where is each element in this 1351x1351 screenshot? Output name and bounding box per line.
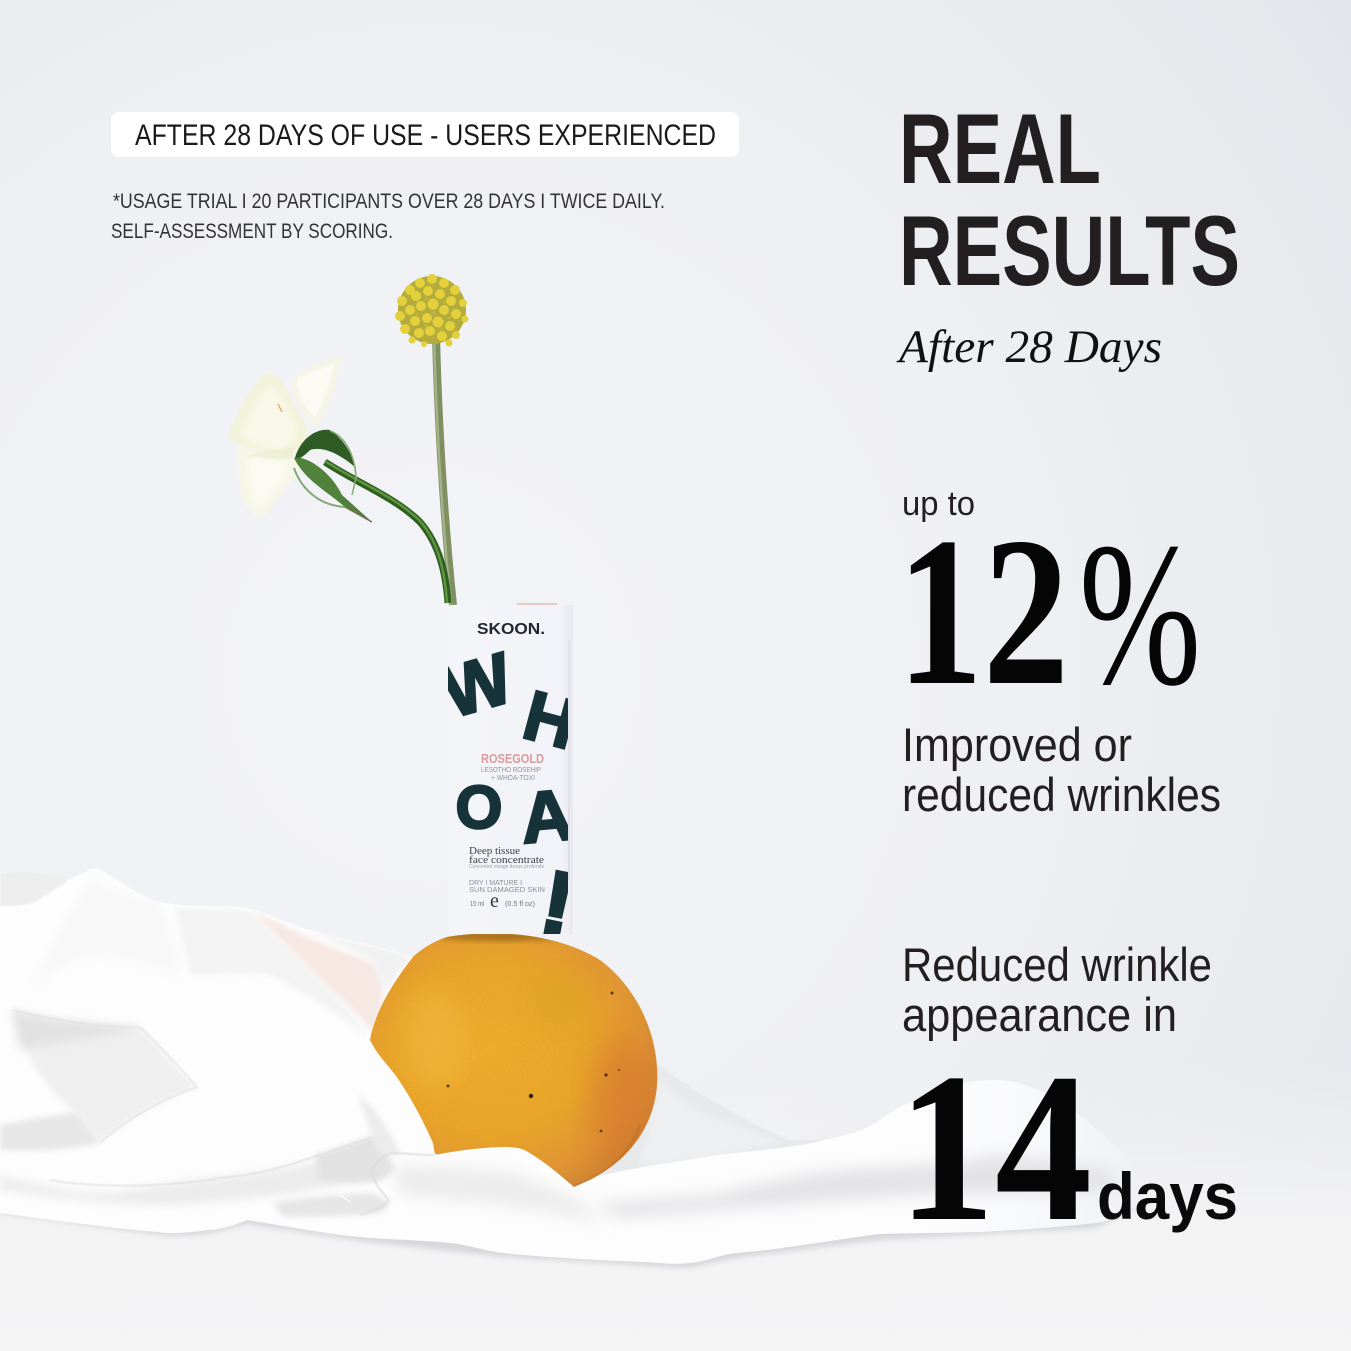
craspedia flower stem (434, 335, 453, 605)
heading: REAL (899, 93, 1101, 204)
footnote: SELF-ASSESSMENT BY SCORING. (111, 220, 393, 243)
orange (370, 934, 658, 1187)
back-left corner (0, 871, 68, 906)
product box: face concentrate (469, 854, 544, 866)
tag: after 28 days (111, 112, 739, 157)
lower left shadow (0, 1112, 100, 1151)
back cloth behind the orange (590, 1050, 824, 1185)
box description: Deep tissue (469, 845, 520, 857)
stat: 14 days: appearance in (902, 988, 1177, 1041)
product box: + WHOA-TOXI (491, 775, 535, 782)
right of front fold shadow (361, 1100, 398, 1152)
rose sepals (294, 430, 372, 522)
shadow under the right strand (592, 1155, 1120, 1218)
cloth shadow on the floor (0, 1205, 1142, 1268)
stat: 12 percent: % (1079, 501, 1201, 728)
box product name: ROSEGOLD (481, 751, 544, 766)
stat: 14 days: 14 (898, 1030, 1092, 1266)
box letters WHOA!: ! (533, 853, 582, 956)
stat: 12 percent: Improved or (902, 718, 1132, 771)
footnote (111, 190, 665, 243)
box letters WHOA! (448, 650, 568, 934)
pink inner fold (255, 912, 383, 1032)
heading (899, 93, 1240, 306)
stat: 14 days: days (1097, 1159, 1238, 1233)
heading: RESULTS (899, 195, 1240, 306)
product box: DRY I MATURE I (469, 878, 522, 887)
box letters WHOA!: O (456, 774, 502, 841)
grey pocket (273, 1193, 390, 1217)
box letters WHOA!: A (518, 775, 576, 859)
stat: 12 percent (897, 485, 1221, 821)
photo: product still life (0, 274, 1142, 1268)
product box: e (490, 890, 499, 912)
upper sheet shading (30, 880, 182, 990)
rose flower (227, 357, 372, 522)
stat: 12 percent: 12 (897, 494, 1069, 730)
hollow left shadow (28, 1028, 192, 1139)
product box: Concentré visage tissus profonds (469, 864, 544, 870)
band under the front sheet (0, 1163, 338, 1206)
product box: (0.5 fl oz) (505, 899, 535, 908)
stat: 12 percent: up to (902, 485, 975, 523)
box letters WHOA!: H (516, 676, 585, 764)
tag: after 28 days: AFTER 28 DAYS OF USE - USERS EXPERIENCED (135, 119, 716, 152)
stat: 14 days (898, 938, 1238, 1266)
craspedia ball (395, 274, 468, 347)
product box: LESOTHO ROSEHIP (481, 767, 541, 774)
subheading: After 28 Days (896, 321, 1162, 373)
box brand: SKOON. (477, 621, 545, 638)
rose stem (325, 461, 448, 603)
product box: SUN DAMAGED SKIN (469, 885, 545, 894)
lower flap shading (396, 1166, 588, 1218)
footnote: *USAGE TRIAL I 20 PARTICIPANTS OVER 28 DAYS I TWICE DAILY. (113, 190, 665, 213)
stat: 14 days: Reduced wrinkle (902, 938, 1212, 991)
crease lines (13, 1010, 197, 1143)
white cloth (0, 868, 1142, 1264)
stat: 12 percent: reduced wrinkles (902, 768, 1221, 821)
product box: 15 ml (470, 899, 484, 908)
textured middle panel (180, 911, 354, 1024)
box letters WHOA!: W (434, 638, 521, 734)
product box (448, 603, 573, 934)
